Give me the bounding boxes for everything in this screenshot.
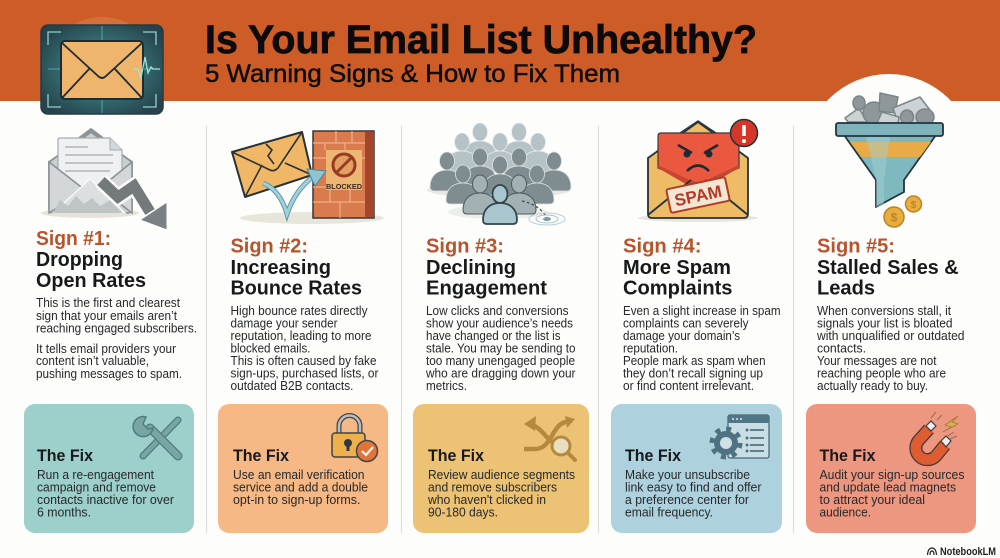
- panel: sign 4: [611, 120, 782, 533]
- fix card 3: The Fix: [428, 446, 485, 465]
- text: sign 4 description: reputation.: [623, 342, 678, 356]
- heading: sign 5: Leads: [817, 276, 875, 300]
- fix card 2: Use an email verification: [233, 468, 365, 482]
- icon: funnel with rocks and coins: [836, 93, 943, 227]
- fix card 3: and remove subscribers: [428, 480, 557, 494]
- icon: angry spam envelope: SPAM: [673, 182, 724, 210]
- heading: sign 4: Sign #4:: [623, 234, 702, 258]
- fix card 3: [413, 404, 589, 533]
- text: sign 5 description: Your messages are not: [817, 354, 937, 368]
- header banner: [0, 0, 1000, 244]
- fix card 4: a preference center for: [625, 493, 749, 507]
- icon: gear and settings panel: [712, 415, 769, 458]
- text: sign 1 description: This is the first and clearest: [36, 296, 180, 310]
- text: sign 1 description: sign that your emails aren’t: [36, 309, 177, 323]
- heading: sign 2: Increasing: [230, 256, 331, 279]
- text: sign 2 description: outdated B2B contacts.: [230, 379, 354, 393]
- fix card 5: Audit your sign-up sources: [820, 468, 964, 482]
- text: sign 1 description: content isn’t valuable,: [36, 354, 149, 368]
- heading: sign 2: [230, 234, 362, 300]
- text: sign 3 description: have changed or the list is: [426, 329, 560, 343]
- text: sign 5 description: When conversions stall, it: [817, 304, 951, 318]
- fix card 5: and update lead magnets: [820, 480, 956, 494]
- text: sign 2 description: damage your sender: [230, 316, 338, 330]
- icon: crossing arrows and magnifier: [524, 416, 575, 460]
- text: sign 2 description: High bounce rates directly: [230, 304, 368, 318]
- icon: padlock with check: [332, 416, 378, 462]
- fix card 1: 6 months.: [37, 506, 91, 520]
- text: sign 5 description: actually ready to buy.: [817, 379, 928, 393]
- fix card 1: The Fix: [37, 446, 94, 465]
- icon: funnel with rocks and coins: $: [911, 200, 917, 211]
- text: sign 2 description: reputation, leading to more: [230, 329, 372, 343]
- text: sign 3 description: metrics.: [426, 379, 467, 393]
- heading: sign 3: [426, 234, 547, 300]
- fix card 4: Make your unsubscribe: [625, 468, 750, 482]
- text: sign 2 description: This is often caused by fake: [230, 354, 377, 368]
- text: sign 3 description: stale. You may be sending to: [426, 342, 576, 356]
- fix card 5: audience.: [820, 506, 871, 520]
- icon: funnel with rocks and coins: $: [891, 210, 898, 224]
- title: Is Your Email List Unhealthy?: [205, 18, 757, 62]
- text: sign 5 description: reaching people who are: [817, 366, 946, 380]
- heading: sign 5: Sign #5:: [817, 234, 895, 258]
- panel: sign 1: [24, 129, 197, 533]
- heading: sign 2: Sign #2:: [230, 234, 308, 258]
- fix card 2: The Fix: [233, 446, 290, 465]
- text: sign 3 description: show your audience’s needs: [426, 316, 573, 330]
- text: sign 4 description: [623, 304, 780, 393]
- fix card 1: campaign and remove: [37, 480, 156, 494]
- text: sign 2 description: sign-ups, purchased lists, or: [230, 366, 378, 380]
- text: sign 1 description: pushing messages to spam.: [36, 367, 182, 381]
- text: sign 4 description: People mark as spam when: [623, 354, 766, 368]
- icon: magnet with lightning: [916, 412, 958, 460]
- fix card 4: email frequency.: [625, 506, 713, 520]
- icon: broken envelope and brick wall: BLOCKED: [326, 182, 363, 191]
- heading: sign 4: More Spam: [623, 256, 731, 279]
- fix card 3: 90-180 days.: [428, 506, 498, 520]
- icon: wrench and screwdriver: [133, 417, 178, 456]
- fix card 2: [218, 404, 388, 533]
- text: sign 5 description: with unqualified or outdated: [816, 329, 965, 343]
- text: sign 3 description: who are dragging down your: [425, 366, 576, 380]
- fix card 5: The Fix: [820, 446, 876, 465]
- heading: sign 3: Declining: [426, 256, 516, 279]
- icon: open envelope with falling arrow: [41, 129, 167, 230]
- text: sign 4 description: Even a slight increase in spam: [623, 304, 780, 318]
- icon: broken envelope and brick wall: [232, 131, 384, 224]
- panel: sign 2: [218, 131, 388, 533]
- text: sign 3 description: too many unengaged people: [426, 354, 575, 368]
- text: sign 4 description: complaints can severely: [623, 316, 749, 330]
- icon: email health monitor: [41, 25, 163, 114]
- fix card 4: link easy to find and offer: [625, 480, 762, 494]
- fix card 3: who haven't clicked in: [427, 493, 546, 507]
- heading: sign 3: Engagement: [426, 276, 547, 300]
- heading: sign 1: Dropping: [36, 248, 123, 271]
- fix card 5: [806, 404, 976, 533]
- text: sign 4 description: or find content irrelevant.: [623, 379, 754, 393]
- heading: sign 5: [817, 234, 959, 300]
- fix card 4: The Fix: [625, 446, 682, 465]
- heading: sign 3: Sign #3:: [426, 234, 504, 258]
- heading: sign 1: Sign #1:: [36, 227, 111, 250]
- fix card 3: Review audience segments: [428, 468, 575, 482]
- fix card 1: contacts inactive for over: [37, 493, 174, 507]
- text: sign 4 description: they don’t recall signing up: [623, 366, 763, 380]
- text: sign 1 description: [36, 296, 197, 381]
- subtitle: 5 Warning Signs & How to Fix Them: [205, 60, 620, 88]
- text: sign 1 description: reaching engaged subscribers.: [36, 322, 197, 336]
- text: sign 5 description: contacts.: [817, 342, 866, 356]
- text: sign 3 description: Low clicks and conversions: [426, 304, 568, 318]
- fix card 2: opt-in to sign-up forms.: [233, 493, 360, 507]
- text: sign 2 description: [230, 304, 378, 393]
- heading: sign 1: Open Rates: [36, 269, 146, 292]
- column dividers: [206, 125, 794, 533]
- fix card 1: Run a re-engagement: [37, 468, 155, 482]
- panel: sign 5: [806, 93, 976, 533]
- heading: sign 4: [623, 234, 732, 300]
- heading: sign 1: [36, 227, 146, 292]
- text: sign 2 description: blocked emails.: [230, 342, 310, 356]
- fix card 4: [611, 404, 782, 533]
- heading: sign 2: Bounce Rates: [230, 276, 362, 300]
- text: sign 4 description: damage your domain’s: [623, 329, 740, 343]
- icon: angry spam envelope: [638, 120, 758, 222]
- text: sign 3 description: [425, 304, 576, 393]
- text: sign 5 description: signals your list is bloated: [817, 316, 953, 330]
- fix card 5: to attract your ideal: [820, 493, 925, 507]
- fix card 2: service and add a double: [233, 480, 368, 494]
- text: sign 1 description: It tells email providers your: [36, 342, 176, 356]
- panel: sign 3: [413, 123, 589, 533]
- text: sign 5 description: [816, 304, 965, 393]
- heading: sign 5: Stalled Sales &: [817, 256, 959, 279]
- heading: sign 4: Complaints: [623, 276, 732, 300]
- icon: crowd of disengaged people: [427, 123, 571, 225]
- fix card 1: [24, 404, 194, 533]
